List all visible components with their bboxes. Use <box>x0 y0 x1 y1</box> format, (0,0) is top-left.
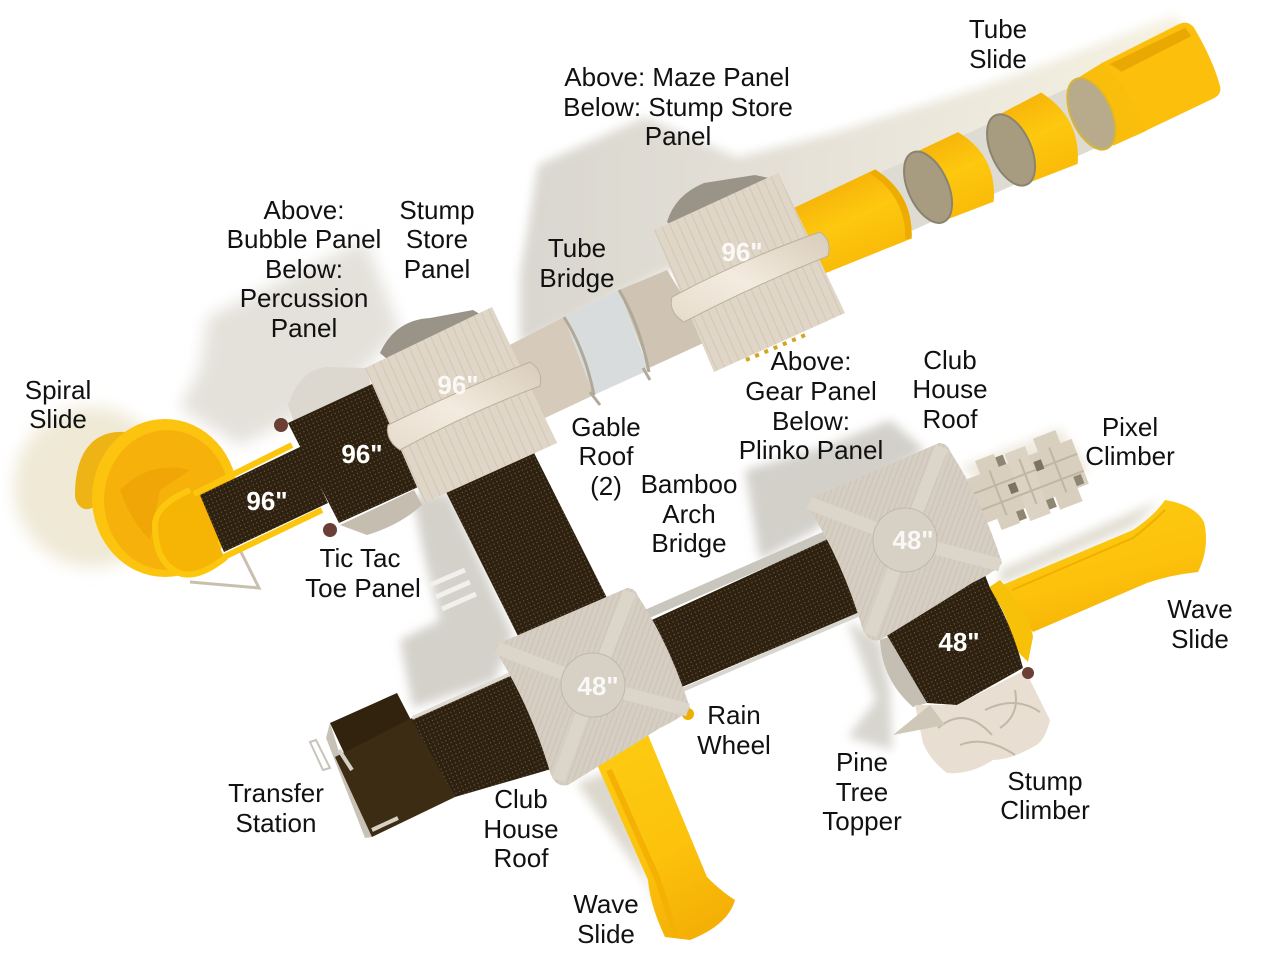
label: gable roof: Gable <box>571 412 641 442</box>
label: tic tac toe panel: Toe Panel <box>305 573 421 603</box>
spiral slide <box>75 419 259 588</box>
segment 4 <box>788 164 920 279</box>
label: gear panel: Plinko Panel <box>739 435 883 465</box>
stump climber <box>880 637 1050 773</box>
label: maze panel: Panel <box>645 121 711 151</box>
label: wave slide bottom: Wave <box>573 889 639 919</box>
label: pine tree topper: Topper <box>822 806 902 836</box>
label: tube slide: Tube <box>969 14 1027 44</box>
label: stump climber: Climber <box>1000 795 1090 825</box>
label: club house roof lower: Club <box>494 784 548 814</box>
panels behind decks <box>288 175 810 535</box>
right club house roof <box>807 443 1002 640</box>
bamboo arch bridge right <box>630 531 865 692</box>
right club house roof: 48" <box>892 525 934 555</box>
label: transfer station: Transfer <box>228 778 324 808</box>
label: tube bridge: Tube <box>548 233 606 263</box>
right wave slide <box>988 500 1206 662</box>
label: stump store panel: Store <box>406 224 468 254</box>
label: transfer station: Station <box>236 808 316 838</box>
label: bubble panel: Bubble Panel <box>227 224 381 254</box>
lens 3 <box>894 144 962 230</box>
finial <box>274 418 288 432</box>
label: rain wheel: Rain <box>707 700 761 730</box>
label: bubble panel: Percussion <box>240 283 368 313</box>
bottom wave slide <box>595 708 735 940</box>
label: bubble panel: Above: <box>264 195 344 225</box>
finial <box>1022 667 1034 679</box>
label: wave slide right: Slide <box>1171 624 1229 654</box>
pine tree topper <box>893 705 945 735</box>
label: pine tree topper: Pine <box>836 747 888 777</box>
label: bamboo arch bridge: Bridge <box>651 528 727 558</box>
label: spiral slide: Spiral <box>25 375 91 405</box>
label: pixel climber: Climber <box>1085 441 1175 471</box>
label: spiral slide: Slide <box>29 404 87 434</box>
rain wheel <box>682 708 694 720</box>
label: wave slide right: Wave <box>1167 594 1233 624</box>
label: club house roof upper: House <box>912 374 988 404</box>
label: bamboo arch bridge: Bamboo <box>641 469 737 499</box>
label: bamboo arch bridge: Arch <box>662 499 716 529</box>
label: rain wheel: Wheel <box>697 730 771 760</box>
clear tube sections <box>882 74 1128 232</box>
label: tube slide: Slide <box>969 44 1027 74</box>
label: stump climber: Stump <box>1007 766 1083 796</box>
label: gable roof: Roof <box>579 441 634 471</box>
label: gable roof: (2) <box>590 471 622 501</box>
left club house roof <box>495 588 690 785</box>
finial <box>323 523 337 537</box>
upper gable roof: 96" <box>721 237 763 267</box>
segment 2 <box>995 87 1087 186</box>
upper left deck <box>274 378 438 537</box>
lens 1 <box>1057 71 1125 157</box>
bamboo bridge steep <box>440 435 608 650</box>
label: pixel climber: Pixel <box>1102 412 1158 442</box>
lower gable roof: 96" <box>437 370 479 400</box>
label: club house roof upper: Roof <box>923 404 978 434</box>
label: club house roof lower: House <box>483 814 559 844</box>
label: stump store panel: Stump <box>399 195 475 225</box>
pixel climber <box>962 426 1094 537</box>
flume end <box>1100 18 1226 136</box>
label: gear panel: Below: <box>772 406 850 436</box>
label: gear panel: Above: <box>771 346 851 376</box>
left club house roof: 48" <box>577 671 619 701</box>
label: maze panel: Above: Maze Panel <box>564 62 790 92</box>
label: wave slide bottom: Slide <box>577 919 635 949</box>
label: gear panel: Gear Panel <box>745 376 877 406</box>
segment 3 <box>912 126 1003 224</box>
label: bubble panel: Panel <box>271 313 337 343</box>
spiral slide chute <box>194 445 328 557</box>
upper left deck: 96" <box>341 439 383 469</box>
label: bubble panel: Below: <box>265 254 343 284</box>
tube slide <box>785 18 1227 279</box>
label: stump store panel: Panel <box>404 254 470 284</box>
lens 2 <box>977 107 1045 193</box>
upper gable roof <box>654 173 845 372</box>
label: club house roof lower: Roof <box>494 843 549 873</box>
label: tube bridge: Bridge <box>539 263 615 293</box>
spiral slide chute: 96" <box>246 486 288 516</box>
right deck <box>880 575 1023 705</box>
lower gable roof <box>365 307 557 503</box>
label: maze panel: Below: Stump Store <box>563 92 793 122</box>
tube bridge <box>500 270 710 425</box>
label: pine tree topper: Tree <box>836 777 888 807</box>
collar <box>1074 58 1147 149</box>
right deck: 48" <box>938 627 980 657</box>
label: tic tac toe panel: Tic Tac <box>320 543 400 573</box>
label: club house roof upper: Club <box>923 345 977 375</box>
transfer station and lower bridge <box>310 672 565 838</box>
